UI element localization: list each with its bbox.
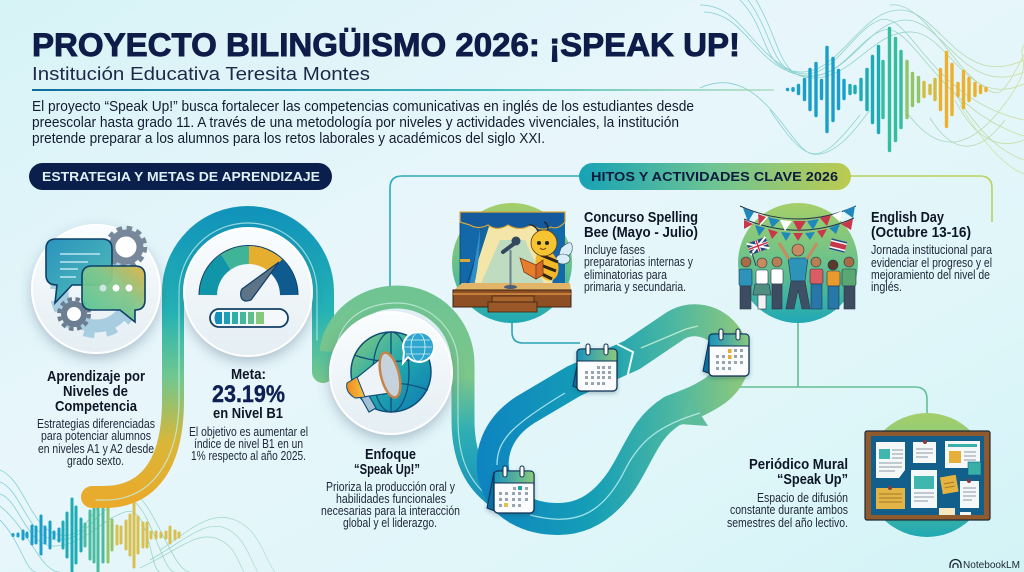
heading: learning by levels bbox=[47, 368, 145, 415]
panel: Spelling Bee bbox=[452, 203, 698, 323]
heading: Periódico Mural bbox=[749, 456, 848, 488]
heading: English Day bbox=[871, 209, 971, 241]
text: Speak Up focus: habilidades funcionales bbox=[336, 492, 446, 506]
heading: milestones pill: HITOS Y ACTIVIDADES CLAVE 2026 bbox=[591, 169, 838, 184]
heading: Spelling Bee: Bee (Mayo - Julio) bbox=[584, 224, 698, 241]
text: Speak Up focus: global y el liderazgo. bbox=[343, 516, 437, 530]
heading: goal: Meta: bbox=[231, 366, 266, 383]
decorative sound waves: bottom left bbox=[0, 470, 275, 572]
audio waveform: bottom left bbox=[13, 495, 179, 572]
text: Spelling Bee: Incluye fases bbox=[584, 243, 645, 257]
text: Spelling Bee: eliminatorias para bbox=[584, 268, 667, 282]
text: learning by levels: para potenciar alumnos bbox=[41, 429, 151, 443]
text: goal: índice de nivel B1 en un bbox=[194, 437, 303, 451]
text: Periódico Mural bbox=[727, 491, 848, 530]
panel: English Day bbox=[738, 203, 992, 323]
text: goal: El objetivo es aumentar el bbox=[189, 425, 308, 439]
text: Speak Up focus bbox=[321, 480, 460, 530]
students bbox=[739, 243, 856, 309]
panel: goal bbox=[184, 228, 312, 463]
milestones loop ribbon bbox=[493, 320, 733, 519]
heading: learning by levels: Competencia bbox=[55, 398, 138, 415]
intro paragraph: El proyecto “Speak Up!” busca fortalecer las competencias comunicativas en inglés de los estudiantes desde bbox=[32, 99, 694, 115]
text: Spelling Bee: primaria y secundaria. bbox=[584, 280, 686, 294]
heading: English Day: English Day bbox=[871, 209, 945, 226]
heading: Spelling Bee bbox=[584, 209, 698, 241]
text: learning by levels bbox=[37, 417, 155, 468]
heading: milestones pill bbox=[579, 163, 851, 190]
intro paragraph bbox=[32, 99, 694, 147]
heading: learning by levels: Niveles de bbox=[63, 383, 128, 400]
audio waveform: top right bbox=[788, 28, 986, 150]
intro paragraph: pretende preparar a los alumnos para los retos laborales y académicos del siglo XXI. bbox=[32, 131, 545, 147]
heading: Spelling Bee: Concurso Spelling bbox=[584, 209, 698, 226]
icon: calendar 2 bbox=[703, 329, 749, 376]
decorative sound waves: top right bbox=[700, 0, 1024, 174]
heading: Periódico Mural: Periódico Mural bbox=[749, 456, 848, 473]
panel: Periódico Mural bbox=[727, 413, 990, 537]
icon: calendar 1 bbox=[573, 344, 617, 391]
text: Periódico Mural: Espacio de difusión bbox=[757, 491, 848, 505]
icon: calendar 3 bbox=[487, 466, 534, 513]
heading: strategy pill: ESTRATEGIA Y METAS DE APRENDIZAJE bbox=[42, 169, 320, 184]
title: PROYECTO BILINGÜISMO 2026: ¡SPEAK UP! bbox=[32, 27, 740, 63]
text: Periódico Mural: constante durante ambos bbox=[730, 503, 848, 517]
title rule bbox=[32, 89, 774, 91]
heading: Speak Up focus: “Speak Up!” bbox=[354, 461, 420, 478]
text: Speak Up focus: necesarias para la interacción bbox=[321, 504, 460, 518]
text: Spelling Bee bbox=[584, 243, 694, 294]
icon: chat bubbles and gears bbox=[32, 225, 160, 353]
heading: English Day: (Octubre 13-16) bbox=[871, 224, 971, 241]
text: English Day: Jornada institucional para bbox=[871, 243, 992, 257]
heading: Speak Up focus: Enfoque bbox=[365, 446, 416, 463]
text: Spelling Bee: preparatorias internas y bbox=[584, 255, 694, 269]
illustration: students celebrating bbox=[738, 203, 858, 323]
intro paragraph: preescolar hasta grado 11. A través de una metodología por niveles y actividades vivenciales, la institución bbox=[32, 115, 679, 131]
heading: Speak Up focus bbox=[354, 446, 420, 478]
subtitle: Institución Educativa Teresita Montes bbox=[32, 63, 370, 84]
illustration: bulletin board bbox=[865, 413, 990, 537]
text: learning by levels: Estrategias diferenciadas bbox=[37, 417, 155, 431]
text: Periódico Mural: semestres del año lectivo. bbox=[727, 516, 848, 530]
logo: NotebookLM: NotebookLM bbox=[963, 559, 1020, 571]
heading: strategy pill bbox=[29, 163, 332, 190]
icon: globe and megaphone bbox=[330, 312, 452, 434]
learning path ribbon: strategy bbox=[92, 217, 323, 500]
text: English Day: inglés. bbox=[871, 280, 902, 294]
text: learning by levels: grado sexto. bbox=[67, 454, 124, 468]
text: English Day: evidenciar el progreso y el bbox=[871, 256, 992, 270]
illustration: stage with bee bbox=[452, 203, 572, 323]
connector lines bbox=[390, 176, 992, 415]
stat: 23.19%: 23.19% bbox=[212, 381, 285, 408]
text: English Day bbox=[871, 243, 992, 294]
text: Speak Up focus: Prioriza la producción oral y bbox=[326, 480, 456, 494]
icon: gauge and progress bar bbox=[184, 228, 312, 356]
text: English Day: mejoramiento del nivel de bbox=[871, 268, 990, 282]
heading: learning by levels: Aprendizaje por bbox=[47, 368, 145, 385]
learning path ribbon: focus arch bbox=[331, 297, 510, 505]
heading: Periódico Mural: “Speak Up” bbox=[777, 471, 848, 488]
panel: learning by levels bbox=[32, 225, 160, 468]
panel: Speak Up focus bbox=[321, 312, 460, 530]
stat label: en Nivel B1 bbox=[213, 405, 283, 422]
text: learning by levels: en niveles A1 y A2 desde bbox=[38, 442, 154, 456]
text: goal bbox=[189, 425, 308, 463]
text: goal: 1% respecto al año 2025. bbox=[191, 449, 306, 463]
